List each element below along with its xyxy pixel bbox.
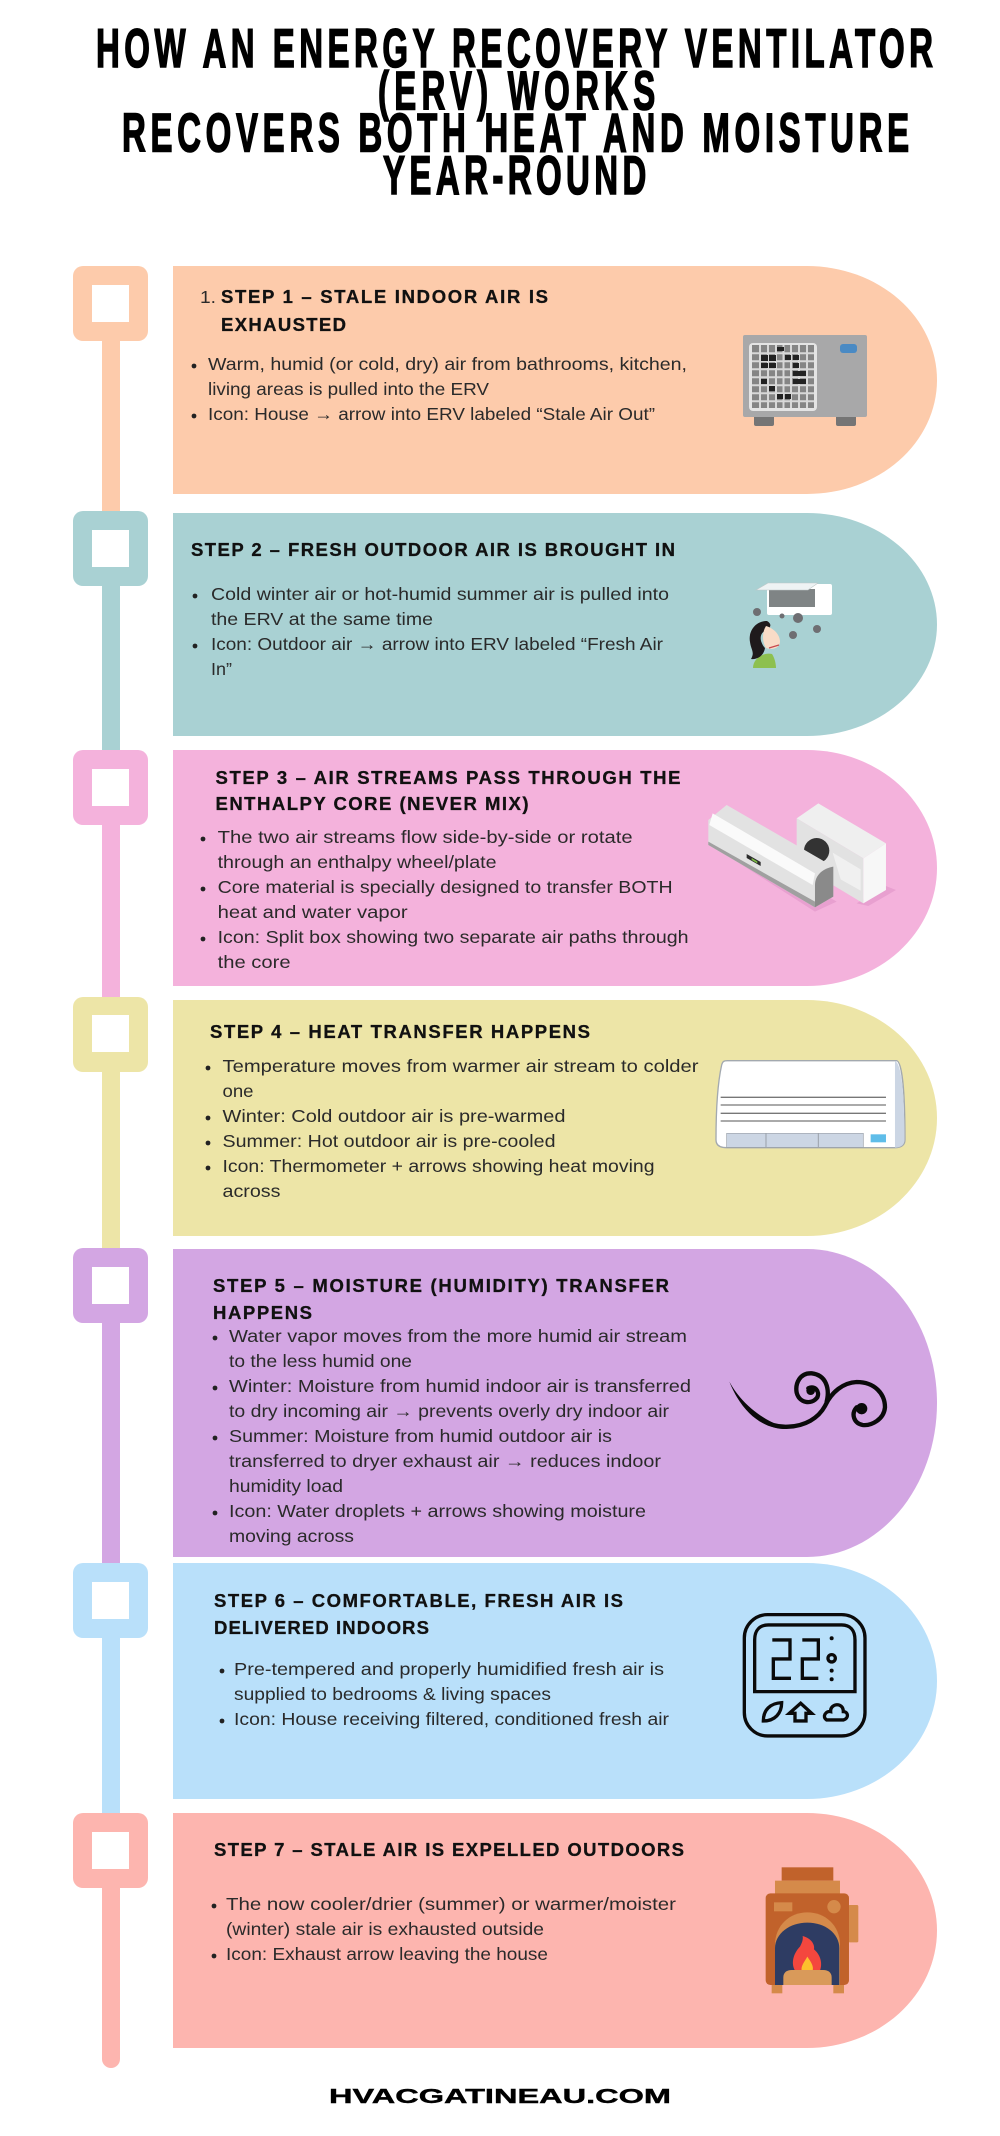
step 7 body text: Icon: Exhaust arrow leaving the house bbox=[226, 1944, 548, 1964]
icon: split air conditioner bbox=[708, 803, 896, 912]
step 4 body text: Winter: Cold outdoor air is pre-warmed bbox=[222, 1106, 566, 1126]
icon: furnace with flame bbox=[766, 1867, 858, 1993]
timeline marker 3 bbox=[73, 750, 148, 1005]
step 3 body text: the core bbox=[218, 952, 291, 972]
panel: step 1 bbox=[173, 266, 937, 494]
step 6 bbox=[73, 1563, 937, 1823]
step 5 body text: Summer: Moisture from humid outdoor air is bbox=[229, 1426, 612, 1446]
title: YEAR-ROUND bbox=[383, 144, 646, 206]
step 5 body text: humidity load bbox=[229, 1476, 343, 1496]
step 2 bbox=[73, 511, 937, 760]
step 4 bbox=[73, 997, 937, 1257]
step 5 heading: STEP 5 – MOISTURE (HUMIDITY) TRANSFER bbox=[213, 1275, 669, 1296]
timeline marker 6 bbox=[73, 1563, 148, 1823]
step 4 heading: STEP 4 – HEAT TRANSFER HAPPENS bbox=[210, 1021, 590, 1042]
step 1 body text: living areas is pulled into the ERV bbox=[208, 379, 489, 399]
step 2 body text: the ERV at the same time bbox=[211, 609, 433, 629]
step 5 bbox=[73, 1248, 937, 1572]
panel: step 3 bbox=[173, 750, 937, 986]
step 5 body text: Icon: Water droplets + arrows showing moisture bbox=[229, 1501, 646, 1521]
panel: step 7 bbox=[173, 1813, 937, 2048]
footer website: HVACGATINEAU.COM bbox=[329, 2086, 671, 2108]
title: (ERV) WORKS bbox=[378, 60, 655, 122]
step 6 heading bbox=[214, 1590, 623, 1638]
step 1 body text: Icon: House → arrow into ERV labeled “Stale Air Out” bbox=[208, 404, 655, 424]
step 3 heading: STEP 3 – AIR STREAMS PASS THROUGH THE bbox=[216, 767, 680, 788]
step 3 bbox=[73, 750, 937, 1005]
timeline marker 4 bbox=[73, 997, 148, 1257]
step 6 body text: Icon: House receiving filtered, conditioned fresh air bbox=[234, 1709, 669, 1729]
icon: wall-mounted air conditioner bbox=[716, 1061, 905, 1148]
step 7 bbox=[73, 1813, 937, 2068]
step 1 heading: EXHAUSTED bbox=[221, 314, 346, 335]
step 1 heading bbox=[200, 286, 548, 335]
step 5 body text bbox=[213, 1326, 691, 1546]
step 4 body text: across bbox=[222, 1181, 281, 1201]
timeline marker 5 bbox=[73, 1248, 148, 1572]
step 1 heading: 1. bbox=[200, 287, 216, 307]
step 3 body text: through an enthalpy wheel/plate bbox=[218, 852, 497, 872]
step 3 heading: ENTHALPY CORE (NEVER MIX) bbox=[216, 793, 528, 814]
step 5 body text: Winter: Moisture from humid indoor air is transferred bbox=[229, 1376, 691, 1396]
icon: air swirl bbox=[729, 1373, 885, 1429]
step 6 heading: DELIVERED INDOORS bbox=[214, 1617, 429, 1638]
step 3 body text: heat and water vapor bbox=[218, 902, 408, 922]
panel: step 4 bbox=[173, 1000, 937, 1236]
step 6 body text: Pre-tempered and properly humidified fresh air is bbox=[234, 1659, 664, 1679]
step 1 body text: Warm, humid (or cold, dry) air from bathrooms, kitchen, bbox=[208, 354, 687, 374]
timeline marker 7 bbox=[73, 1813, 148, 2068]
step 4 body text: Summer: Hot outdoor air is pre-cooled bbox=[222, 1131, 556, 1151]
step 2 body text: Icon: Outdoor air → arrow into ERV labeled “Fresh Air bbox=[211, 634, 663, 654]
step 5 heading: HAPPENS bbox=[213, 1302, 312, 1323]
step 2 body text: Cold winter air or hot-humid summer air is pulled into bbox=[211, 584, 669, 604]
step 5 body text: to dry incoming air → prevents overly dry indoor air bbox=[229, 1401, 669, 1421]
title: HOW AN ENERGY RECOVERY VENTILATOR bbox=[96, 17, 933, 79]
step 4 body text: one bbox=[222, 1081, 254, 1101]
step 3 body text: Core material is specially designed to transfer BOTH bbox=[218, 877, 673, 897]
step 2 body text: In” bbox=[211, 659, 232, 679]
step 3 body text: The two air streams flow side-by-side or rotate bbox=[218, 827, 633, 847]
step 5 body text: to the less humid one bbox=[229, 1351, 412, 1371]
step 5 heading bbox=[213, 1275, 669, 1323]
step 4 body text: Icon: Thermometer + arrows showing heat moving bbox=[222, 1156, 654, 1176]
title bbox=[96, 17, 933, 206]
step 1 heading: STEP 1 – STALE INDOOR AIR IS bbox=[221, 286, 548, 307]
panel: step 5 bbox=[173, 1249, 937, 1557]
step 3 body text: Icon: Split box showing two separate air paths through bbox=[218, 927, 689, 947]
step 4 body text: Temperature moves from warmer air stream to colder bbox=[222, 1056, 699, 1076]
step 7 body text bbox=[212, 1894, 676, 1964]
timeline marker 2 bbox=[73, 511, 148, 760]
icon: thermostat bbox=[744, 1615, 865, 1736]
step 7 body text: The now cooler/drier (summer) or warmer/moister bbox=[226, 1894, 676, 1914]
timeline marker 1 bbox=[73, 266, 148, 520]
step 1 bbox=[73, 266, 937, 520]
step 6 body text: supplied to bedrooms & living spaces bbox=[234, 1684, 551, 1704]
step 3 body text bbox=[201, 827, 689, 972]
step 2 heading: STEP 2 – FRESH OUTDOOR AIR IS BROUGHT IN bbox=[191, 539, 675, 560]
panel: step 2 bbox=[173, 513, 937, 736]
step 4 body text bbox=[206, 1056, 699, 1201]
icon: outdoor ventilation unit bbox=[743, 335, 867, 426]
step 2 body text bbox=[193, 584, 669, 679]
step 7 heading: STEP 7 – STALE AIR IS EXPELLED OUTDOORS bbox=[214, 1839, 684, 1860]
step 6 body text bbox=[220, 1659, 669, 1729]
step 5 body text: Water vapor moves from the more humid air stream bbox=[229, 1326, 687, 1346]
title: RECOVERS BOTH HEAT AND MOISTURE bbox=[122, 102, 909, 164]
step 5 body text: transferred to dryer exhaust air → reduces indoor bbox=[229, 1451, 661, 1471]
step 3 heading bbox=[216, 767, 680, 814]
panel: step 6 bbox=[173, 1563, 937, 1799]
step 1 body text bbox=[192, 354, 687, 424]
icon: air conditioner and woman in dusty air bbox=[750, 583, 832, 668]
step 6 heading: STEP 6 – COMFORTABLE, FRESH AIR IS bbox=[214, 1590, 623, 1611]
step 7 body text: (winter) stale air is exhausted outside bbox=[226, 1919, 544, 1939]
step 5 body text: moving across bbox=[229, 1526, 354, 1546]
